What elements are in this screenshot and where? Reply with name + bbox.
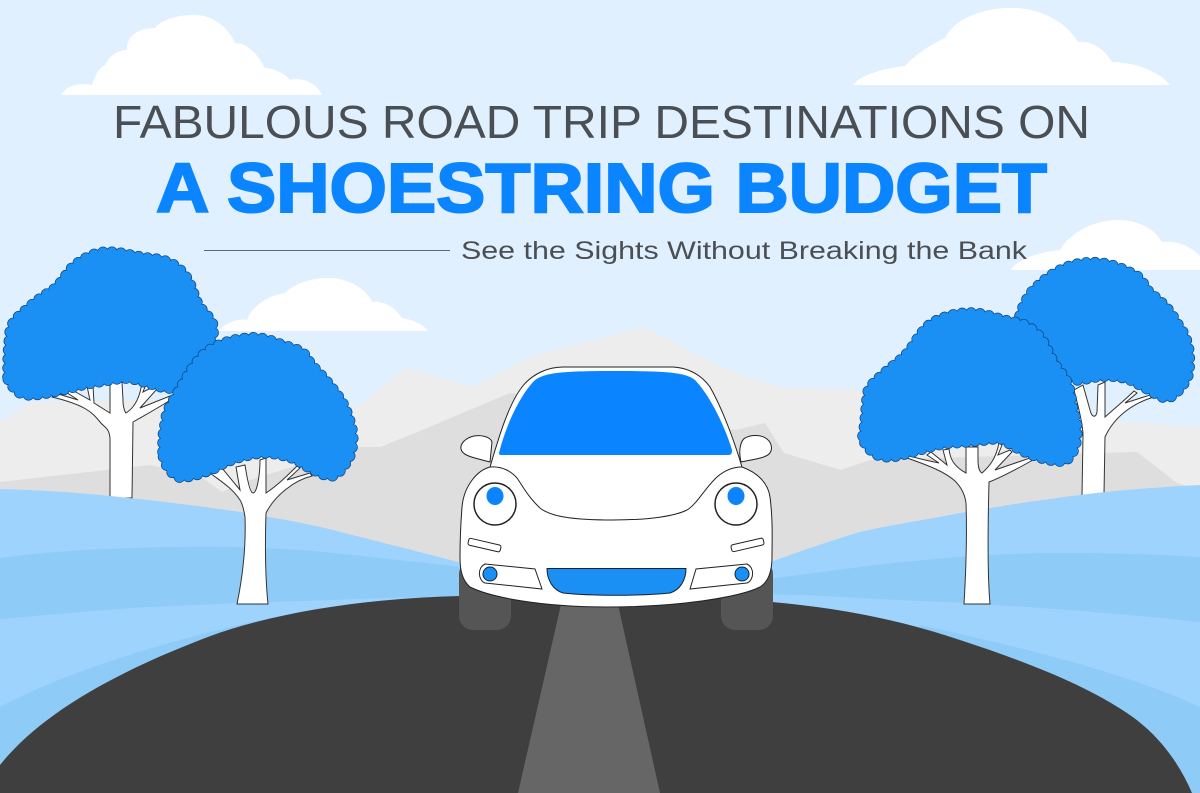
car headlight: left <box>474 483 516 525</box>
tree: front right <box>863 313 1077 604</box>
tree trunk: front left <box>210 458 312 604</box>
hills: left <box>0 489 470 793</box>
title line one: FABULOUS ROAD TRIP DESTINATIONS ON <box>113 96 1090 148</box>
tree: front left <box>163 338 353 604</box>
car headlight: right <box>715 483 757 525</box>
subtitle: See the Sights Without Breaking the Bank <box>461 237 1028 265</box>
car hood line <box>490 467 742 520</box>
road <box>0 594 1192 793</box>
tree canopy: rear right <box>1020 263 1189 398</box>
hills: right <box>760 485 1200 793</box>
tree trunk: rear left <box>52 382 172 498</box>
tree trunk: front right <box>907 443 1033 604</box>
tree canopy: front left <box>163 338 353 477</box>
road center stripe <box>518 600 660 793</box>
tree: rear right <box>1020 263 1189 496</box>
car <box>459 367 773 630</box>
cloud: top left <box>61 15 322 95</box>
car mirror: left <box>461 436 492 462</box>
car wheel: right <box>721 560 773 630</box>
car mirror: right <box>740 435 771 462</box>
car body <box>460 367 772 607</box>
tree canopy: front right <box>863 313 1077 461</box>
title line two: A SHOESTRING BUDGET <box>156 149 1047 227</box>
cloud: top right <box>853 8 1170 85</box>
mountains: near range <box>0 393 1200 570</box>
car indicator: left <box>468 538 501 552</box>
cloud: right by subtitle <box>1010 220 1200 270</box>
car fog light: left <box>479 564 542 589</box>
car wheel: left <box>459 560 511 630</box>
car indicator: right <box>731 538 764 552</box>
car grille <box>547 568 686 595</box>
subtitle rule <box>204 250 450 251</box>
car windshield <box>499 371 732 455</box>
tree: rear left <box>8 252 213 498</box>
mountains: far range <box>0 327 1200 520</box>
tree trunk: rear right <box>1074 382 1151 496</box>
car fog light: right <box>690 564 753 589</box>
cloud: center left <box>218 278 428 331</box>
tree canopy: rear left <box>8 252 213 395</box>
